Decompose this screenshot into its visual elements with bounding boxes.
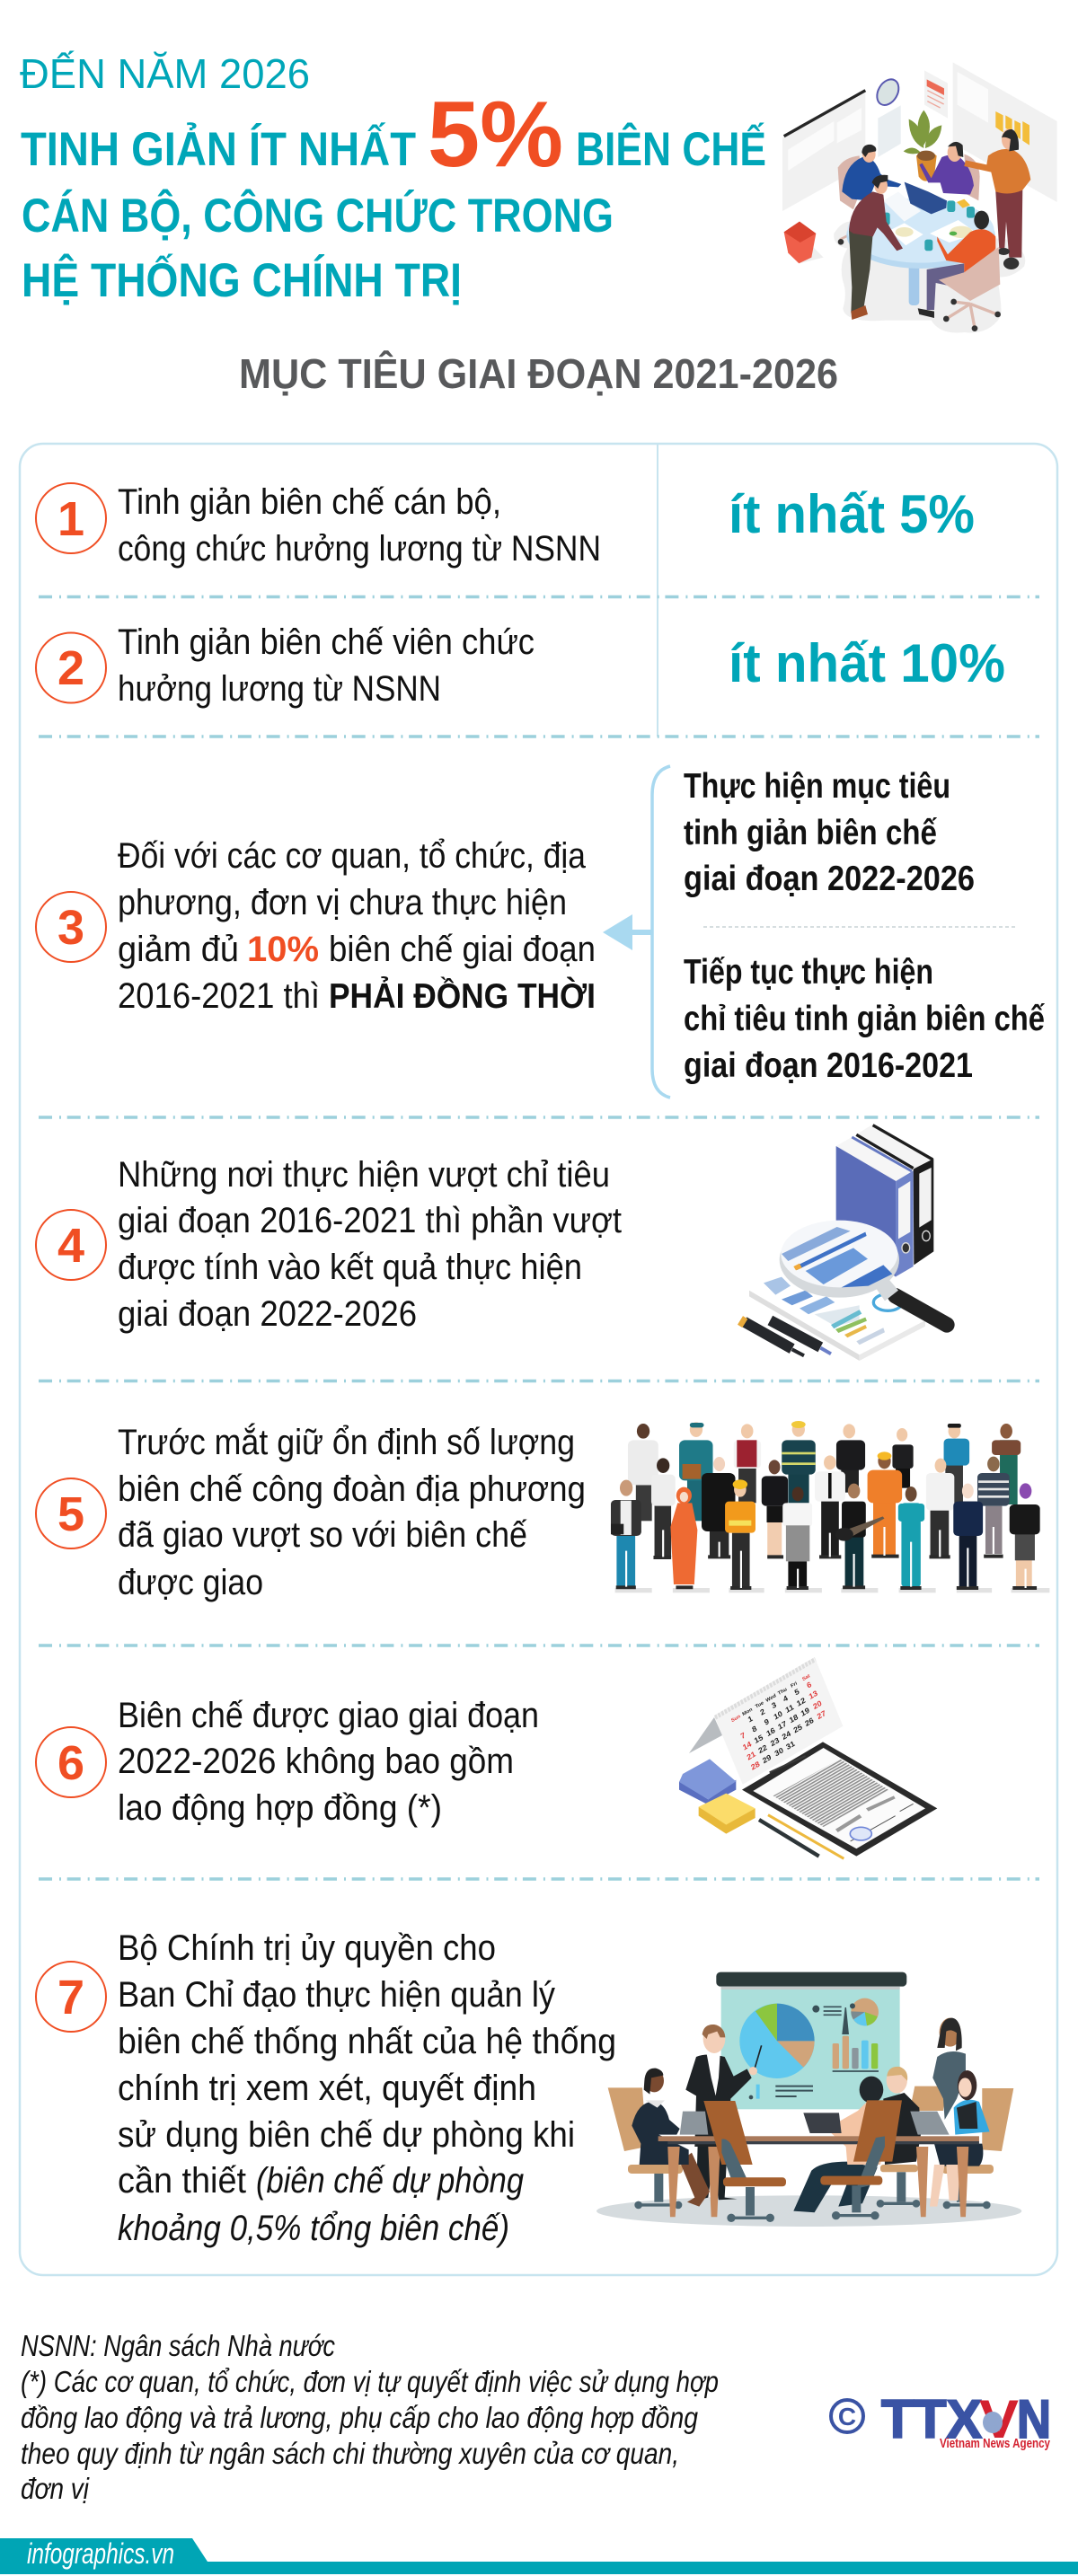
sub-point 1 bbox=[684, 767, 975, 898]
calendar: 23 bbox=[769, 1735, 781, 1748]
kicker: by 2026: ĐẾN NĂM 2026 bbox=[20, 50, 310, 97]
item 4 text: Những nơi thực hiện vượt chỉ tiêu bbox=[118, 1155, 610, 1195]
calendar: 1 bbox=[747, 1714, 754, 1724]
standing man in maroon bbox=[849, 175, 903, 320]
calendar: 15 bbox=[753, 1733, 764, 1745]
title line 2: CÁN BỘ, CÔNG CHỨC TRONG bbox=[22, 188, 614, 243]
calendar: 12 bbox=[795, 1696, 807, 1708]
item 1 value: ít nhất 5% bbox=[729, 484, 975, 544]
pen and pencil bbox=[759, 1815, 844, 1858]
footnotes: theo quy định từ ngân sách chi thường xuyên của cơ quan, bbox=[21, 2437, 679, 2470]
calendar: 6 bbox=[806, 1680, 813, 1689]
calendar: 16 bbox=[765, 1725, 776, 1738]
number badge 7 bbox=[36, 1962, 106, 2032]
middle row of workers bbox=[651, 1451, 1010, 1557]
item 5 text: đã giao vượt so với biên chế bbox=[118, 1515, 527, 1555]
calendar: 21 bbox=[746, 1750, 757, 1762]
highlighted 5 percent: 5% bbox=[428, 83, 563, 187]
item 4 bbox=[36, 1125, 947, 1361]
item 7 text: biên chế thống nhất của hệ thống bbox=[118, 2022, 616, 2061]
calendar: 2 bbox=[759, 1707, 766, 1717]
item 7 text: chính trị xem xét, quyết định bbox=[118, 2069, 536, 2108]
item 3 text: 2016-2021 thì bbox=[118, 976, 320, 1016]
leg gaps bbox=[626, 1527, 1026, 1588]
calendar: 27 bbox=[816, 1708, 827, 1721]
front row of workers bbox=[611, 1479, 1040, 1588]
panel: main targets frame bbox=[20, 444, 1057, 2275]
item 7 text: Bộ Chính trị ủy quyền cho bbox=[118, 1928, 496, 1968]
number badge 3 bbox=[36, 892, 106, 962]
man with back to viewer bbox=[793, 2077, 892, 2212]
item 3 text: phương, đơn vị chưa thực hiện bbox=[118, 883, 567, 922]
item 2 text: Tinh giản biên chế viên chức bbox=[118, 622, 535, 662]
calendar: 8 bbox=[751, 1724, 758, 1734]
item 7 text bbox=[118, 1928, 616, 2248]
calendar bbox=[714, 1657, 843, 1785]
laptops bbox=[680, 2112, 708, 2135]
illustration: calendar, clipboard, sticky notes bbox=[679, 1657, 937, 1858]
heading: targets 2021-2026: MỤC TIÊU GIAI ĐOẠN 2021-2026 bbox=[239, 350, 838, 397]
standing woman right bbox=[932, 2018, 966, 2120]
calendar: 20 bbox=[812, 1698, 823, 1711]
footnotes: NSNN: Ngân sách Nhà nước bbox=[21, 2329, 335, 2362]
item 1 text: Tinh giản biên chế cán bộ, bbox=[118, 482, 501, 522]
calendar: 22 bbox=[757, 1742, 768, 1755]
seated woman left bbox=[632, 2069, 710, 2207]
seated man in blue bbox=[842, 145, 901, 200]
item 7 text: sử dụng biên chế dự phòng khi bbox=[118, 2115, 575, 2155]
illustration: business meeting with presentation board bbox=[596, 1972, 1021, 2227]
illustration: workers of many professions bbox=[611, 1421, 1049, 1591]
footer bar bbox=[0, 2537, 1078, 2574]
number badge 6 bbox=[36, 1727, 106, 1797]
logo: TTXVN copyright: V bbox=[979, 2389, 1019, 2449]
item 1 text bbox=[118, 482, 601, 569]
title line 1 start: TINH GIẢN ÍT NHẤT bbox=[21, 122, 416, 176]
sub-point 1: Thực hiện mục tiêu bbox=[684, 767, 950, 806]
calendar: 25 bbox=[792, 1722, 803, 1734]
item 7 text: cần thiết bbox=[118, 2161, 246, 2201]
calendar: 9 bbox=[763, 1716, 770, 1727]
sub-point 1: tinh giản biên chế bbox=[684, 814, 937, 852]
item 3 bbox=[36, 766, 1045, 1098]
item 4 text: được tính vào kết quả thực hiện bbox=[118, 1248, 582, 1287]
calendar: 10 bbox=[773, 1709, 783, 1722]
plant bbox=[904, 110, 941, 154]
front chair left bbox=[703, 2101, 786, 2222]
item 1 bbox=[36, 482, 975, 569]
logo: TTXVN copyright: C bbox=[838, 2403, 856, 2430]
number badge 7: 7 bbox=[57, 1971, 84, 2025]
red bin bbox=[784, 222, 816, 263]
front chair right bbox=[820, 2100, 902, 2219]
arrow pointing to item 3 text bbox=[603, 914, 652, 950]
item 7 text: khoảng 0,5% tổng biên chế) bbox=[118, 2209, 509, 2248]
title line 3: HỆ THỐNG CHÍNH TRỊ bbox=[22, 252, 462, 307]
item 5 text: Trước mắt giữ ổn định số lượng bbox=[118, 1422, 575, 1462]
calendar: 24 bbox=[781, 1729, 792, 1742]
item 6 text bbox=[118, 1696, 539, 1828]
calendar: 28 bbox=[750, 1760, 761, 1772]
sub-point 2 bbox=[684, 953, 1045, 1085]
calendar: Wed bbox=[765, 1693, 777, 1704]
calendar: 31 bbox=[785, 1739, 796, 1751]
markers bbox=[740, 1320, 831, 1355]
item 2 bbox=[36, 622, 1005, 709]
calendar: 11 bbox=[784, 1702, 795, 1715]
item 3 text: PHẢI ĐỒNG THỜI bbox=[329, 976, 596, 1016]
item 5 text bbox=[118, 1422, 586, 1602]
presentation board bbox=[716, 1972, 906, 2109]
item 6 text: lao động hợp đồng (*) bbox=[118, 1788, 442, 1828]
yellow sticky notes bbox=[699, 1794, 755, 1834]
item 2 text: hưởng lương từ NSNN bbox=[118, 669, 441, 709]
number badge 5 bbox=[36, 1478, 106, 1548]
item 5 text: được giao bbox=[118, 1563, 263, 1602]
item 4 text bbox=[118, 1155, 622, 1334]
calendar: Sun bbox=[730, 1714, 742, 1724]
calendar: 5 bbox=[793, 1687, 800, 1697]
sub-point 2: Tiếp tục thực hiện bbox=[684, 953, 933, 992]
number badge 4: 4 bbox=[57, 1219, 84, 1273]
item 6 text: 2022-2026 không bao gồm bbox=[118, 1742, 514, 1781]
number badge 2: 2 bbox=[57, 641, 84, 695]
footnotes: (*) Các cơ quan, tổ chức, đơn vị tự quyết định việc sử dụng hợp bbox=[21, 2365, 719, 2398]
number badge 1: 1 bbox=[57, 492, 84, 546]
floor shadows bbox=[615, 1584, 1049, 1598]
bracket bbox=[652, 766, 670, 1098]
calendar: 17 bbox=[776, 1719, 788, 1732]
woman in purple bbox=[919, 142, 974, 195]
calendar: Sat bbox=[801, 1673, 811, 1682]
chairs behind bbox=[838, 155, 862, 209]
title line 1 end: BIÊN CHẾ bbox=[576, 121, 766, 176]
source site: infographics.vn bbox=[27, 2537, 174, 2570]
number badge 1 bbox=[36, 483, 106, 553]
calendar: 19 bbox=[800, 1706, 811, 1718]
item 5 text: biên chế công đoàn địa phương bbox=[118, 1469, 586, 1509]
item 1 text: công chức hưởng lương từ NSNN bbox=[118, 529, 601, 569]
calendar: 3 bbox=[770, 1700, 778, 1710]
illustration: binders, magnifier, documents bbox=[740, 1125, 947, 1361]
paper stack bbox=[749, 1277, 925, 1361]
item 6 text: Biên chế được giao giai đoạn bbox=[118, 1696, 539, 1735]
calendar: 18 bbox=[788, 1712, 800, 1725]
title block bbox=[20, 50, 766, 307]
calendar: 13 bbox=[808, 1689, 819, 1701]
logo: TTXVN copyright: TTX bbox=[881, 2389, 982, 2449]
item 7 text: (biên chế dự phòng bbox=[256, 2161, 524, 2201]
number badge 3: 3 bbox=[57, 901, 84, 955]
item 2 text bbox=[118, 622, 535, 709]
item 3 text bbox=[118, 836, 596, 1016]
calendar: 4 bbox=[782, 1693, 789, 1704]
number badge 6: 6 bbox=[57, 1736, 84, 1790]
blond man bbox=[883, 2067, 921, 2165]
back chairs bbox=[608, 2087, 647, 2151]
sub-point 1: giai đoạn 2022-2026 bbox=[684, 860, 975, 898]
logo: TTXVN copyright bbox=[831, 2389, 1051, 2451]
woman in blue right bbox=[930, 2070, 990, 2207]
blue sticky notes bbox=[679, 1759, 736, 1804]
calendar: Thu bbox=[777, 1687, 788, 1697]
number badge 5: 5 bbox=[57, 1487, 84, 1541]
calendar: Tue bbox=[755, 1700, 764, 1710]
black binder bbox=[856, 1125, 933, 1265]
footnotes bbox=[21, 2329, 719, 2505]
magnifier bbox=[780, 1221, 947, 1325]
item 3 text: Đối với các cơ quan, tổ chức, địa bbox=[118, 836, 587, 876]
calendar: 30 bbox=[773, 1745, 784, 1758]
blue binder bbox=[836, 1137, 914, 1277]
round table bbox=[846, 182, 995, 305]
standing woman in orange bbox=[964, 128, 1030, 269]
calendar: 26 bbox=[804, 1716, 815, 1728]
illustration: team around a meeting table bbox=[782, 62, 1057, 333]
item 7 text: Ban Chỉ đạo thực hiện quản lý bbox=[118, 1975, 555, 2015]
logo: TTXVN copyright: N bbox=[1017, 2389, 1051, 2449]
number badge 2 bbox=[36, 632, 106, 702]
item 6 bbox=[36, 1657, 937, 1858]
back row of workers bbox=[628, 1421, 1021, 1521]
footnotes: đơn vị bbox=[21, 2472, 90, 2505]
presenter bbox=[685, 2025, 757, 2201]
item 3 text: 10% bbox=[247, 930, 319, 969]
calendar: 7 bbox=[739, 1731, 747, 1741]
shoes bbox=[616, 1557, 1037, 1588]
calendar: 29 bbox=[761, 1752, 773, 1765]
item 4 text: giai đoạn 2022-2026 bbox=[118, 1294, 417, 1334]
calendar fold bbox=[689, 1717, 722, 1753]
item 7 bbox=[36, 1928, 1021, 2248]
item 4 text: giai đoạn 2016-2021 thì phần vượt bbox=[118, 1201, 622, 1240]
number badge 4 bbox=[36, 1210, 106, 1280]
seated man in red with chair bbox=[918, 211, 1001, 331]
item 3 text: giảm đủ bbox=[118, 930, 239, 969]
calendar: 14 bbox=[741, 1739, 753, 1751]
conference table bbox=[658, 2136, 979, 2217]
calendar: Fri bbox=[791, 1681, 799, 1689]
calendar: Mon bbox=[742, 1707, 754, 1717]
clipboard bbox=[742, 1742, 937, 1857]
sub-point 2: giai đoạn 2016-2021 bbox=[684, 1046, 973, 1085]
footnotes: đồng lao động và trả lương, phụ cấp cho lao động hợp đồng bbox=[21, 2401, 699, 2434]
item 2 value: ít nhất 10% bbox=[729, 633, 1005, 693]
item 3 text: biên chế giai đoạn bbox=[329, 930, 596, 969]
item 5 bbox=[36, 1421, 1049, 1602]
